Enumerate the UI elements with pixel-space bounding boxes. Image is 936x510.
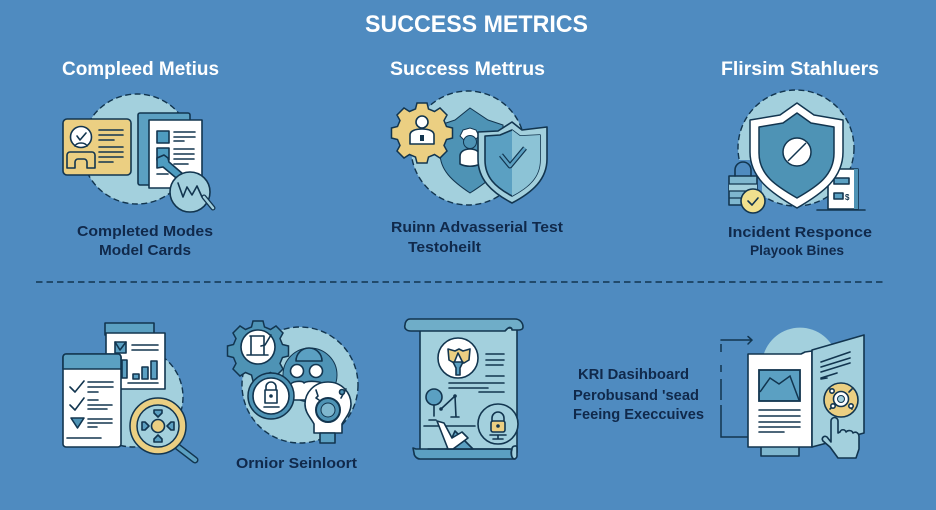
label: incident response playbooks — [728, 224, 872, 258]
icon: gear, lock, people and bulb — [228, 321, 358, 443]
icon: shield, lock and document: $ — [845, 193, 850, 202]
heading: success metrics: Success Mettrus — [390, 59, 545, 80]
label: running adversarial tests: Ruinn Advasserial Test — [391, 219, 563, 236]
heading: stakeholders: Flirsim Stahluers — [721, 59, 879, 80]
label: running adversarial tests — [391, 219, 563, 256]
panel: success metrics — [390, 59, 563, 256]
panel: stakeholders — [721, 59, 879, 258]
icon: open dashboard booklet — [721, 328, 864, 458]
icon: bar chart report — [105, 323, 165, 389]
heading: completed metrics: Compleed Metius — [62, 59, 219, 80]
icon: model card and report — [63, 94, 213, 212]
label: KRI dashboard briefing: Perobusand 'sead — [573, 387, 699, 404]
panel: KRI dashboard — [573, 328, 864, 458]
label: incident response playbooks: Incident Responce — [728, 224, 872, 241]
title: SUCCESS METRICS — [365, 11, 588, 38]
label: KRI dashboard briefing: Feeing Execcuives — [573, 406, 704, 423]
icon: checklist — [63, 354, 121, 447]
icon: gear and shields — [392, 91, 547, 205]
icon: scroll document — [405, 319, 523, 459]
label: senior support: Ornior Seinloort — [236, 455, 357, 472]
label: completed model cards: Model Cards — [99, 242, 191, 259]
icon: shield, lock and document — [726, 90, 865, 213]
label: running adversarial tests: Testoheilt — [408, 239, 481, 256]
label: completed model cards: Completed Modes — [77, 223, 213, 240]
label: KRI dashboard briefing: KRI Dasihboard — [578, 366, 689, 383]
label: KRI dashboard briefing — [573, 366, 704, 423]
panel: checklist and report — [63, 323, 195, 460]
panel: senior support — [228, 321, 358, 472]
label: incident response playbooks: Playook Bines — [750, 242, 844, 258]
label: completed model cards — [77, 223, 213, 259]
panel: completed metrics — [62, 59, 219, 259]
icon: magnifying glass — [130, 398, 195, 460]
panel: governance scroll — [405, 319, 523, 459]
